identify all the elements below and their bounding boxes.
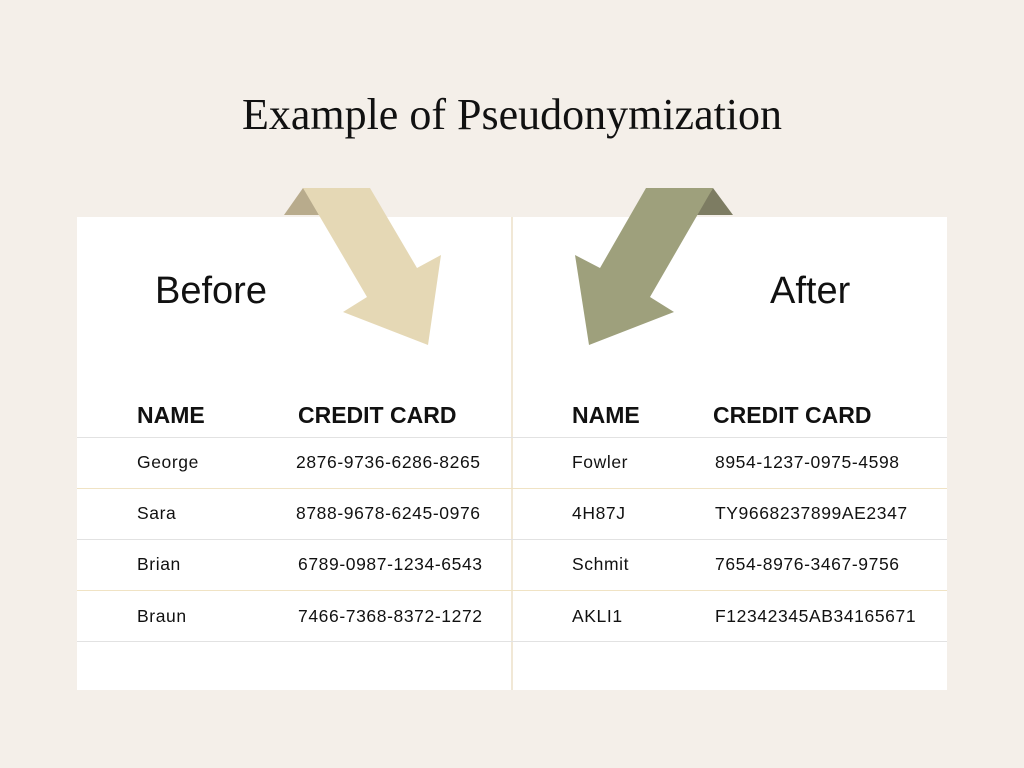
text: NAME: [572, 402, 640, 428]
text: TY9668237899AE2347: [715, 503, 908, 523]
text: CREDIT CARD: [298, 402, 456, 428]
text: Fowler: [572, 452, 628, 472]
heading: before: Before: [155, 270, 267, 312]
text: 8954-1237-0975-4598: [715, 452, 900, 472]
table: after: [572, 402, 916, 626]
title: Example of Pseudonymization: [242, 90, 782, 139]
text: Brian: [137, 554, 181, 574]
text: 2876-9736-6286-8265: [296, 452, 481, 472]
arrow: before: [284, 188, 441, 345]
text: Schmit: [572, 554, 629, 574]
text: Sara: [137, 503, 176, 523]
arrow: after: [575, 188, 733, 345]
text: 4H87J: [572, 503, 626, 523]
text: NAME: [137, 402, 205, 428]
text: 6789-0987-1234-6543: [298, 554, 483, 574]
text: 7466-7368-8372-1272: [298, 606, 483, 626]
text: AKLI1: [572, 606, 623, 626]
text: 7654-8976-3467-9756: [715, 554, 900, 574]
text: George: [137, 452, 199, 472]
text: F12342345AB34165671: [715, 606, 916, 626]
panel: table: [77, 217, 947, 690]
heading: after: After: [770, 270, 850, 312]
text: CREDIT CARD: [713, 402, 871, 428]
text: Braun: [137, 606, 187, 626]
text: 8788-9678-6245-0976: [296, 503, 481, 523]
table: before: [137, 402, 483, 626]
